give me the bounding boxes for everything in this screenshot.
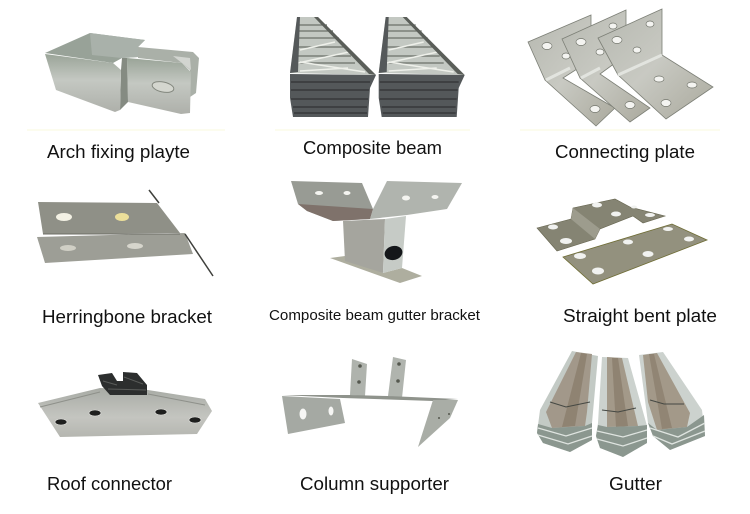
icon: straight bent plates	[537, 199, 707, 284]
icon: roof connector part	[38, 372, 212, 437]
label: herringbone bracket: Herringbone bracket	[42, 306, 212, 327]
panel: herringbone bracket	[37, 190, 213, 327]
panel: straight bent plate	[537, 199, 717, 326]
panel: roof connector	[38, 372, 212, 494]
icon: column supporter part	[282, 357, 458, 447]
icon: herringbone bracket part	[37, 190, 213, 276]
faint scan lines	[27, 129, 720, 131]
icon: three connecting plates	[528, 9, 713, 126]
label: straight bent plate: Straight bent plate	[563, 305, 717, 326]
icon: gutter bracket part	[291, 181, 462, 283]
label: arch fixing playte: Arch fixing playte	[47, 141, 190, 162]
icon: arch fixing plate part	[45, 33, 199, 114]
panel: column supporter	[282, 357, 458, 494]
icon: stacked gutters	[537, 351, 705, 457]
label: composite beam: Composite beam	[303, 137, 442, 158]
icon: composite beam stacks	[290, 17, 465, 117]
panel: composite beam gutter bracket	[269, 181, 481, 324]
label: connecting plate: Connecting plate	[555, 141, 695, 162]
label: gutter: Gutter	[609, 473, 662, 494]
gutter centre	[596, 357, 647, 457]
panel: gutter	[537, 351, 705, 494]
gutter left	[537, 351, 598, 452]
label: column supporter: Column supporter	[300, 473, 449, 494]
panel: arch fixing plate	[45, 33, 199, 162]
gutter right	[639, 352, 705, 450]
label: roof connector: Roof connector	[47, 473, 172, 494]
panel: connecting plate	[528, 9, 713, 162]
panel: composite beam	[290, 17, 465, 158]
label: composite beam gutter bracket: Composite beam gutter bracket	[269, 307, 481, 324]
